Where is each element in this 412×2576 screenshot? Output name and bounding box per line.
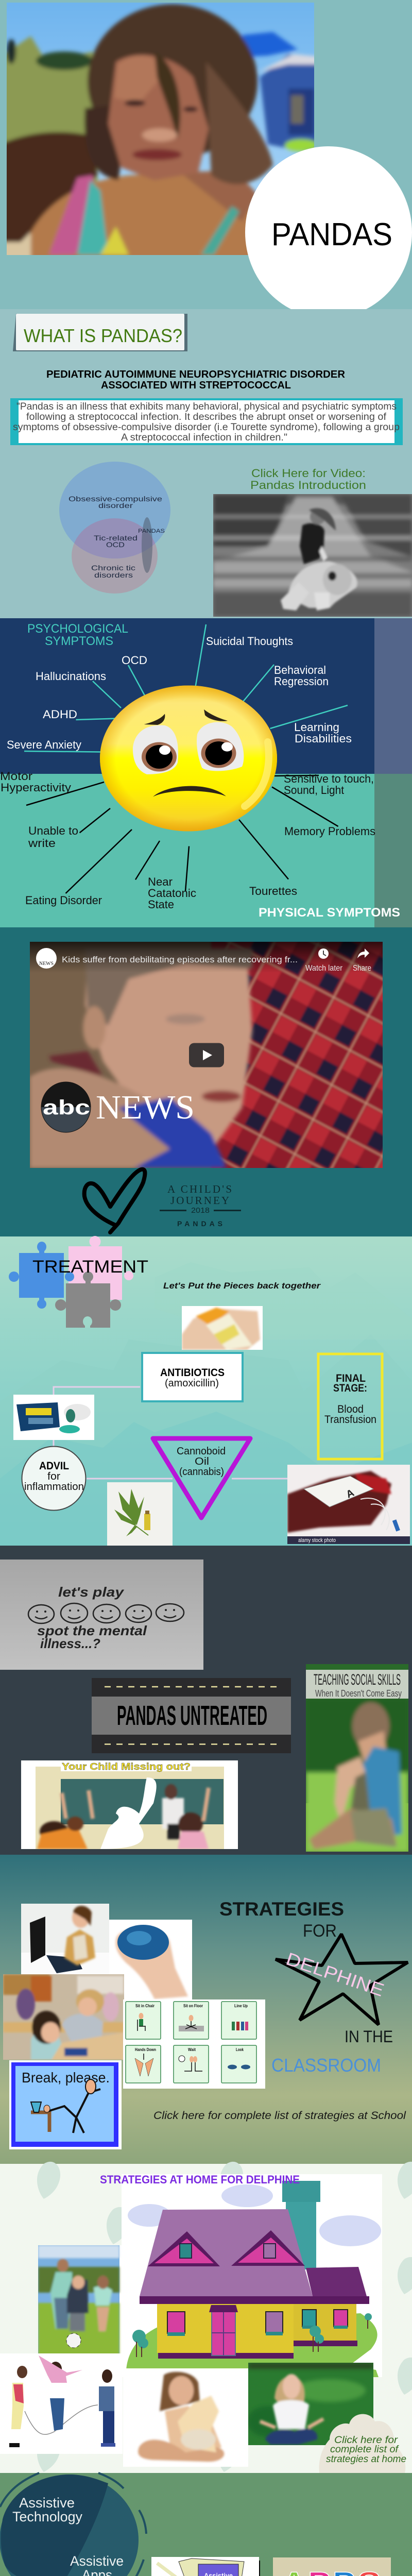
labels: physical symptoms: Tourettes bbox=[249, 885, 297, 897]
heading: classroom: CLASSROOM bbox=[271, 2055, 381, 2076]
box: antibiotics: (amoxicillin) bbox=[165, 1378, 219, 1389]
logo text: a child's journey bbox=[160, 1183, 241, 1228]
heading: full name of disorder: ASSOCIATED WITH STREPTOCOCCAL bbox=[101, 380, 291, 391]
logo: abc news: NEWS bbox=[96, 1089, 195, 1126]
heading: full name of disorder: PEDIATRIC AUTOIMMUNE NEUROPSYCHIATRIC DISORDER bbox=[46, 369, 346, 380]
note: spot the mental illness bbox=[0, 1560, 203, 1670]
icon: share bbox=[353, 948, 371, 973]
labels: physical symptoms: write bbox=[28, 837, 56, 850]
box: assistive apps bbox=[273, 2557, 391, 2576]
chart: visual schedule cards bbox=[123, 1999, 265, 2089]
chart: visual schedule cards: Hands Down bbox=[135, 2047, 156, 2052]
link: video introduction: Pandas Introduction bbox=[250, 479, 366, 492]
puzzle piece: pink bbox=[68, 1236, 133, 1300]
heading sign: what is PANDAS bbox=[13, 314, 187, 351]
logo text: a child's journey: JOURNEY bbox=[170, 1194, 229, 1207]
panel: hero bbox=[0, 0, 412, 318]
image: apps for kids bbox=[273, 2557, 391, 2576]
icon: brush star bbox=[276, 1934, 408, 2025]
box: final stage: STAGE: bbox=[333, 1382, 367, 1394]
image: assistive technology cart bbox=[151, 2557, 259, 2576]
labels: physical symptoms: Catatonic bbox=[148, 887, 196, 900]
box: final stage: Blood bbox=[337, 1403, 364, 1415]
panel: symptoms bbox=[0, 618, 412, 927]
chart: venn diagram: disorders bbox=[94, 571, 133, 579]
labels: physical symptoms: Near bbox=[148, 875, 173, 888]
icon: hand-drawn heart bbox=[84, 1170, 145, 1232]
heading: strategies at home for Delphine: STRATEGIES AT HOME FOR DELPHINE bbox=[100, 2173, 300, 2186]
heading: strategies: STRATEGIES bbox=[219, 1899, 344, 1920]
banner: PANDAS untreated: PANDAS UNTREATED bbox=[117, 1700, 267, 1731]
labels: psychological symptoms: Regression bbox=[274, 675, 329, 688]
note: spot the mental illness: illness...? bbox=[40, 1636, 100, 1651]
labels: physical symptoms: Hyperactivity bbox=[1, 781, 71, 794]
panel: treatment bbox=[0, 1236, 412, 1546]
banner: PANDAS untreated bbox=[92, 1678, 291, 1753]
heading: for: FOR bbox=[303, 1921, 337, 1941]
chart: visual schedule cards: Wait bbox=[188, 2047, 196, 2052]
labels: physical symptoms: Sound, Light bbox=[284, 784, 344, 796]
photo: advil box bbox=[13, 1395, 94, 1440]
heading: full name of disorder bbox=[46, 369, 346, 391]
connector lines: physical bbox=[26, 775, 338, 893]
tagline: put the pieces back together: Let's Put the Pieces back together bbox=[163, 1281, 321, 1291]
photo: teaching social skills poster bbox=[306, 1664, 408, 1852]
triangle: cannabis oil: Oil bbox=[195, 1456, 209, 1467]
text block: definition quote: "Pandas is an illness that exhibits many behavioral, physical and psychiatric symptoms bbox=[16, 401, 397, 412]
photo: smiling girl on the beach bbox=[7, 3, 314, 255]
heading: psychological symptoms: PSYCHOLOGICAL bbox=[27, 622, 128, 636]
channel avatar and title bbox=[36, 948, 298, 969]
box: final stage: FINAL bbox=[336, 1372, 366, 1384]
icon: break please card: Break, please. bbox=[22, 2070, 110, 2086]
circle: advil for inflammation: for bbox=[47, 1471, 60, 1482]
text block: definition quote: A streptococcal infection in children." bbox=[121, 432, 287, 443]
heading: in the: IN THE bbox=[345, 2027, 393, 2046]
triangle: cannabis oil bbox=[153, 1438, 250, 1518]
heading sign: what is PANDAS: WHAT IS PANDAS? bbox=[24, 325, 182, 346]
circle: advil for inflammation: inflammation bbox=[24, 1481, 84, 1493]
logo text: a child's journey: A CHILD'S bbox=[167, 1183, 232, 1195]
text block: definition quote: following a streptococcal infection. It describes the abrupt onset or worsening of bbox=[26, 412, 387, 422]
photo: girl meditating on grass bbox=[248, 2363, 373, 2445]
chart: venn diagram: Tic-related bbox=[94, 534, 138, 542]
circle: assistive technology and apps bbox=[0, 2473, 146, 2576]
icon: puzzle pieces bbox=[9, 1236, 133, 1328]
photo: kids jumping rope bbox=[0, 2353, 123, 2454]
logo text: a child's journey: 2018 bbox=[191, 1206, 210, 1215]
chart: venn diagram: PANDAS bbox=[138, 528, 165, 534]
labels: physical symptoms: Sensitive to touch, bbox=[284, 772, 374, 785]
labels: physical symptoms: Motor bbox=[0, 770, 32, 783]
connector lines: psychological bbox=[24, 624, 348, 752]
photo: blood bag bbox=[287, 1465, 410, 1544]
callout: complete list at home bbox=[319, 2414, 406, 2473]
chart: visual schedule cards: Look bbox=[236, 2047, 244, 2052]
photo: girl hugging puppy bbox=[123, 2368, 248, 2467]
pictograms bbox=[135, 2013, 250, 2076]
labels: psychological symptoms: Hallucinations bbox=[36, 670, 106, 683]
triangle: cannabis oil: (cannabis) bbox=[179, 1466, 224, 1478]
photo: stress ball in hand bbox=[109, 1920, 192, 1999]
box: antibiotics bbox=[142, 1353, 243, 1401]
heading: physical symptoms: PHYSICAL SYMPTOMS bbox=[259, 906, 400, 920]
photo: family playing soccer bbox=[38, 2245, 122, 2353]
labels: psychological symptoms: OCD bbox=[122, 654, 147, 667]
labels: psychological symptoms: Behavioral bbox=[274, 664, 326, 676]
labels: psychological symptoms: Suicidal Thoughts bbox=[206, 635, 293, 648]
chart: visual schedule cards: Sit on Floor bbox=[183, 2004, 203, 2008]
labels: physical symptoms: Memory Problems bbox=[284, 825, 375, 838]
labels: psychological symptoms bbox=[7, 635, 352, 751]
labels: physical symptoms: Unable to bbox=[28, 824, 78, 837]
icon: share: Share bbox=[353, 964, 371, 973]
icon: play button bbox=[189, 1043, 224, 1067]
chart: venn diagram bbox=[59, 462, 170, 594]
chart: venn diagram: OCD bbox=[106, 540, 125, 549]
panel: news video bbox=[0, 927, 412, 1236]
labels: psychological symptoms: Severe Anxiety bbox=[7, 738, 81, 751]
text block: definition quote: symptoms of obsessive-compulsive disorder (i.e Tourette syndrome), following a group bbox=[13, 422, 400, 433]
chart: visual schedule cards: Line Up bbox=[234, 2004, 248, 2008]
labels: physical symptoms: Eating Disorder bbox=[25, 894, 102, 907]
logo: abc news bbox=[41, 1082, 195, 1132]
faces row bbox=[28, 1603, 184, 1623]
box: final stage bbox=[318, 1354, 382, 1459]
title: PANDAS oval: PANDAS bbox=[271, 217, 392, 252]
photo: amoxicillin bottle in hand bbox=[182, 1306, 263, 1350]
note: spot the mental illness: let's play bbox=[58, 1584, 125, 1600]
labels: physical symptoms: State bbox=[148, 898, 174, 911]
panel: strategies at home bbox=[0, 2162, 412, 2473]
circle: advil for inflammation: ADVIL bbox=[39, 1460, 69, 1472]
icon: watch later: Watch later bbox=[305, 964, 343, 973]
puzzle piece: gray bbox=[55, 1272, 121, 1328]
link: video introduction bbox=[250, 467, 366, 492]
panel: assistive technology bbox=[0, 2473, 412, 2576]
callout: complete list at home: Click here for bbox=[334, 2435, 398, 2446]
icon: break please card bbox=[9, 2060, 122, 2149]
circle: advil for inflammation bbox=[22, 1447, 85, 1511]
illustration: house bbox=[122, 2174, 382, 2377]
photo: classroom, your child missing out bbox=[21, 1760, 238, 1849]
channel avatar and title: Kids suffer from debilitating episodes after recovering fr... bbox=[62, 955, 298, 964]
chart: venn diagram: Chronic tic bbox=[91, 564, 135, 572]
link: complete list of strategies at school: Click here for complete list of strategies at School bbox=[153, 2110, 406, 2122]
photo: classroom, your child missing out: Your Child Missing out? bbox=[62, 1761, 191, 1772]
callout: complete list at home: strategies at home bbox=[326, 2454, 406, 2465]
labels: physical symptoms bbox=[0, 770, 375, 911]
circle: assistive technology and apps: Assistive bbox=[70, 2553, 124, 2569]
heading: treatment: TREATMENT bbox=[32, 1257, 148, 1277]
stick figure with feet on desk bbox=[31, 2089, 100, 2133]
box: final stage: Transfusion bbox=[324, 1414, 376, 1426]
labels: psychological symptoms: Learning bbox=[294, 721, 339, 734]
photo: teacher helping student bbox=[3, 1974, 124, 2060]
note: spot the mental illness: spot the mental bbox=[37, 1623, 147, 1638]
title: PANDAS oval bbox=[245, 146, 412, 318]
panel: PANDAS untreated bbox=[0, 1546, 412, 1855]
box: tools list bbox=[151, 2557, 260, 2576]
logo text: a child's journey: PANDAS bbox=[177, 1219, 222, 1228]
channel avatar and title: NEWS bbox=[39, 961, 54, 966]
labels: psychological symptoms: ADHD bbox=[43, 708, 77, 721]
logo: abc news: abc bbox=[43, 1096, 90, 1119]
link: video introduction: Click Here for Video: bbox=[251, 467, 366, 480]
video thumbnail: ABC News bbox=[30, 942, 383, 1168]
chart: visual schedule cards: Sit in Chair bbox=[135, 2004, 154, 2008]
text block: definition quote bbox=[10, 398, 403, 445]
photo: child with teddy bear on a road bbox=[213, 494, 412, 617]
panel: strategies in the classroom bbox=[0, 1855, 412, 2164]
puzzle piece: blue bbox=[9, 1242, 74, 1309]
chart: venn diagram: disorder bbox=[98, 501, 133, 510]
heading: psychological symptoms: SYMPTOMS bbox=[45, 634, 113, 648]
circle: assistive technology and apps: Assistive bbox=[19, 2495, 75, 2511]
circle: assistive technology and apps: Technology bbox=[12, 2509, 82, 2524]
icon: worried face emoji bbox=[100, 685, 277, 832]
photo: cannabis leaf and oil bbox=[107, 1482, 173, 1546]
heading: psychological symptoms bbox=[27, 622, 128, 648]
heading: Delphine: DELPHINE bbox=[283, 1949, 386, 2001]
triangle: cannabis oil: Cannoboid bbox=[177, 1446, 226, 1457]
labels: psychological symptoms: Disabilities bbox=[295, 732, 352, 745]
chart: venn diagram: Obsessive-compulsive bbox=[68, 495, 162, 503]
icon: watch later bbox=[305, 948, 343, 973]
photo: blood bag: A bbox=[345, 1487, 356, 1501]
callout: complete list at home: complete list of bbox=[330, 2444, 399, 2455]
photo: blood bag: alamy stock photo bbox=[298, 1537, 336, 1544]
panel: what is PANDAS bbox=[0, 309, 412, 618]
box: antibiotics: ANTIBIOTICS bbox=[160, 1367, 225, 1379]
photo: boy at computer bbox=[21, 1904, 109, 1974]
connector lines bbox=[54, 1387, 287, 1479]
